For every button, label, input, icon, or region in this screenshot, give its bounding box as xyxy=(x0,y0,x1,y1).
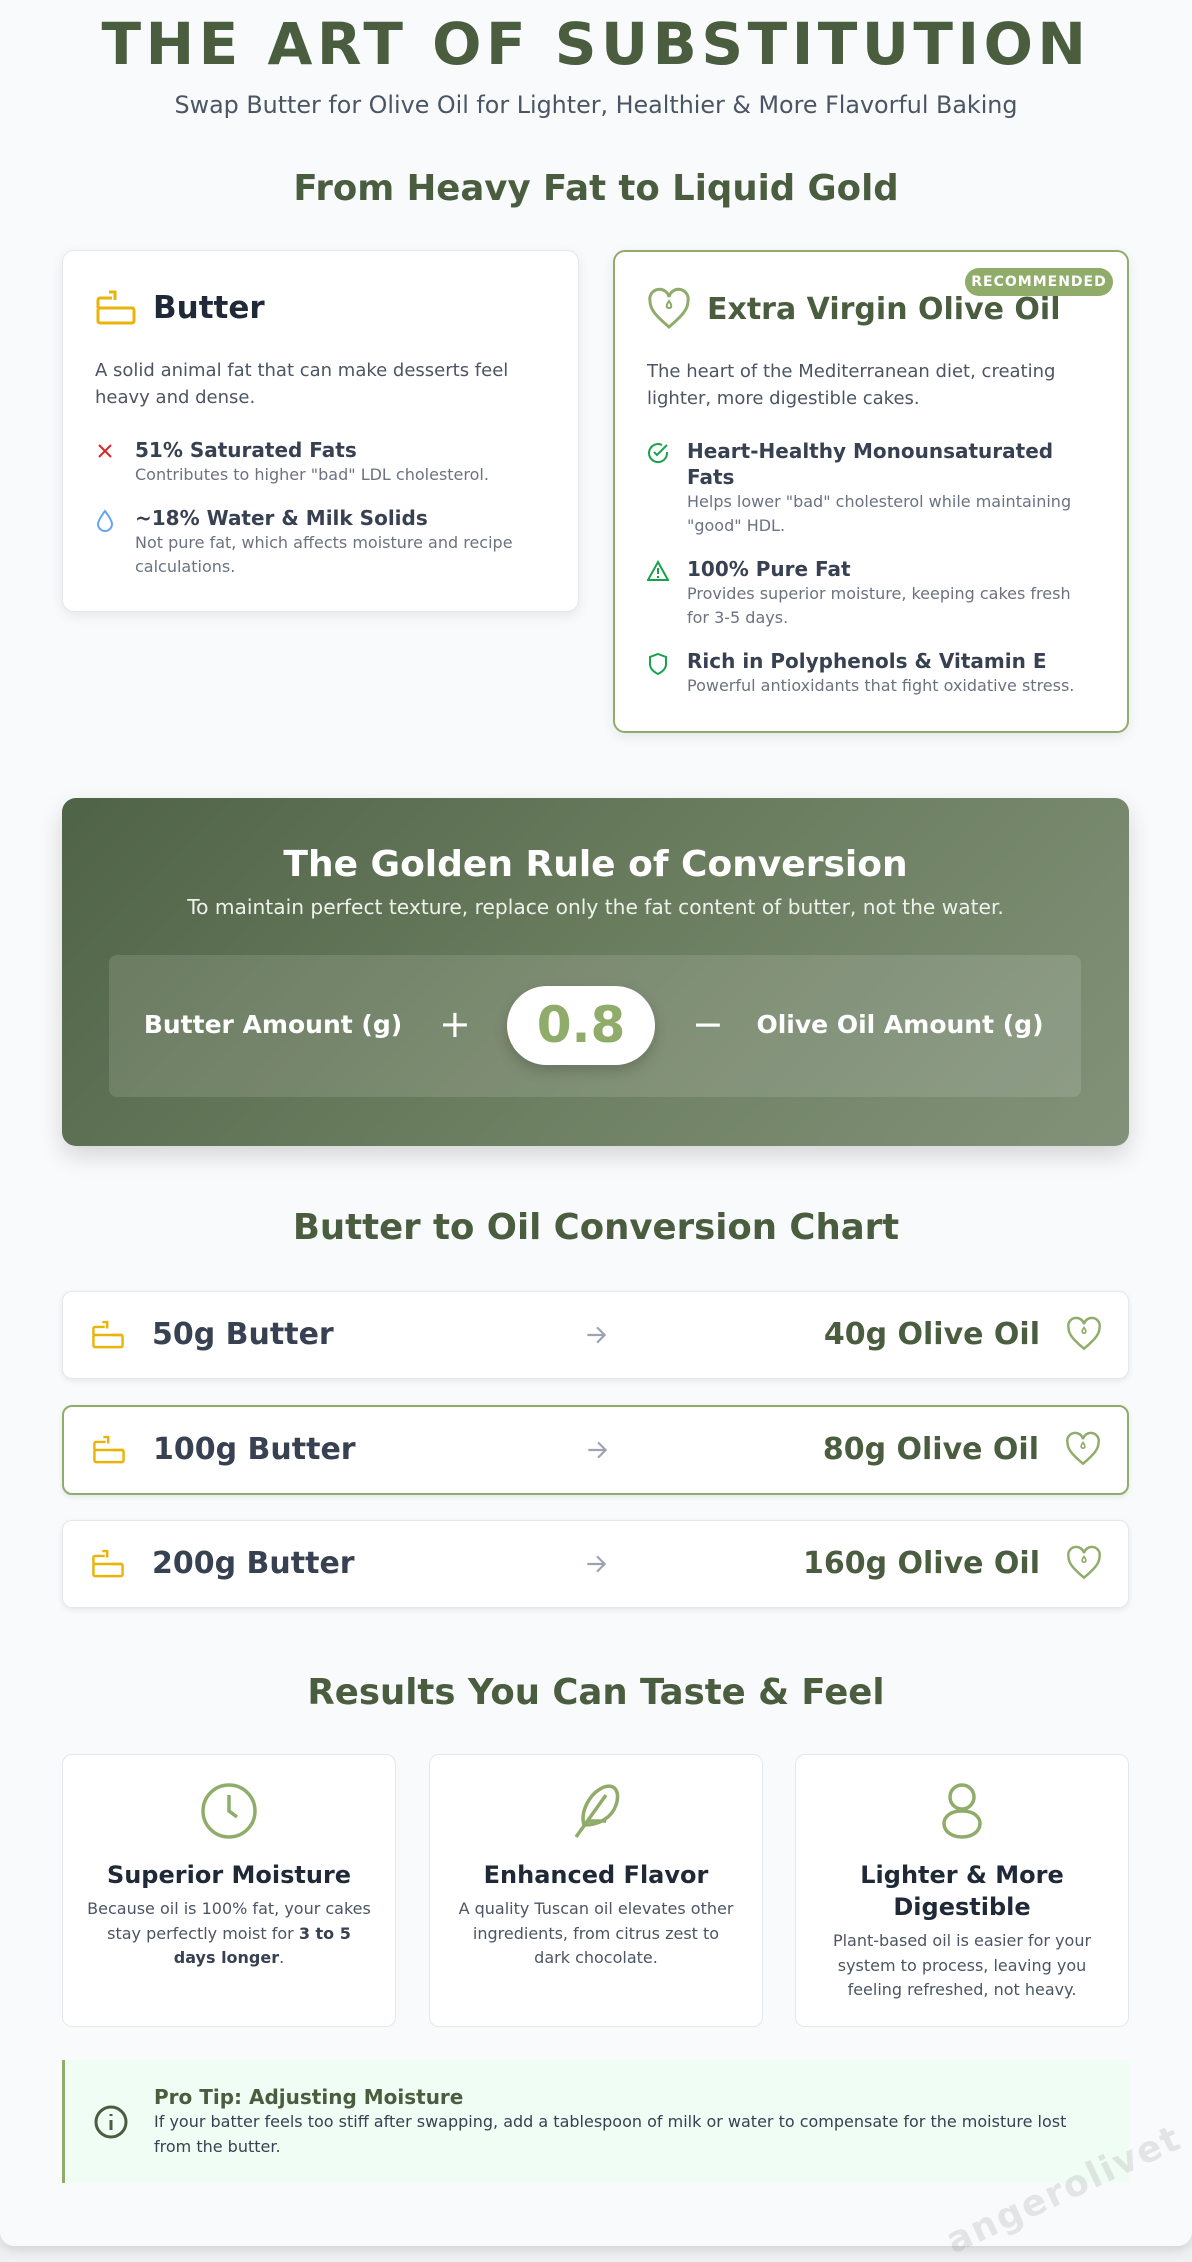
subtitle: Swap Butter for Olive Oil for Lighter, Healthier & More Flavorful Baking xyxy=(174,91,1018,119)
pro tip title: Pro Tip: Adjusting Moisture xyxy=(154,2085,463,2109)
item: water & milk solids xyxy=(97,506,513,576)
heading: conversion chart: Butter to Oil Conversion Chart xyxy=(293,1207,899,1248)
row: 200g xyxy=(62,1520,1129,1608)
item: saturated fats: Contributes to higher "bad" LDL cholesterol. xyxy=(135,465,489,484)
butter header: Butter xyxy=(153,290,265,326)
row: 200g: 200g Butter xyxy=(152,1546,355,1581)
olive header: Extra Virgin Olive Oil xyxy=(707,292,1060,326)
item: pure fat xyxy=(647,557,1071,627)
formula box xyxy=(109,955,1081,1097)
item: monounsaturated xyxy=(648,439,1071,535)
card: lighter & digestible: Lighter & More Digestible xyxy=(860,1861,1064,1921)
item: pure fat: Provides superior moisture, keeping cakes fresh for 3-5 days. xyxy=(687,584,1071,627)
card: enhanced flavor: Enhanced Flavor xyxy=(484,1861,708,1889)
row: 50g: 50g Butter xyxy=(152,1317,334,1352)
card: enhanced flavor: A quality Tuscan oil elevates other ingredients, from citrus zest to dark chocolate. xyxy=(459,1899,733,1967)
item: polyphenols: Powerful antioxidants that fight oxidative stress. xyxy=(687,676,1074,695)
butter description: A solid animal fat that can make desserts feel heavy and dense. xyxy=(95,360,508,408)
pill: 0.8: 0.8 xyxy=(537,996,625,1054)
title: THE ART OF SUBSTITUTION xyxy=(102,10,1090,78)
heading: from heavy fat: From Heavy Fat to Liquid Gold xyxy=(293,168,899,209)
card: enhanced flavor xyxy=(429,1754,763,2027)
item: monounsaturated: Fats xyxy=(687,465,734,489)
panel: butter card xyxy=(62,250,579,612)
operator: plus: + xyxy=(439,1002,471,1046)
panel: olive oil card xyxy=(613,250,1129,733)
card: superior moisture: Superior Moisture xyxy=(107,1861,351,1889)
golden rule title: The Golden Rule of Conversion xyxy=(283,844,908,885)
icon: heart with drop xyxy=(648,288,690,329)
card: superior moisture xyxy=(62,1754,396,2027)
callout: pro tip xyxy=(62,2060,1129,2183)
icon: info xyxy=(94,2106,128,2138)
card: lighter & digestible xyxy=(795,1754,1129,2027)
badge: recommended xyxy=(965,268,1113,296)
olive description: The heart of the Mediterranean diet, creating lighter, more digestible cakes. xyxy=(647,361,1055,409)
row: 200g: 160g Olive Oil xyxy=(803,1546,1040,1581)
butter header xyxy=(96,290,265,326)
row: 100g: 80g Olive Oil xyxy=(823,1432,1039,1467)
row: 100g xyxy=(62,1405,1129,1495)
icon: person xyxy=(942,1783,982,1839)
item: monounsaturated: Heart-Healthy Monounsaturated xyxy=(687,439,1053,463)
pro tip text: If your batter feels too stiff after swapping, add a tablespoon of milk or water to compensate for the moisture lost from the butter. xyxy=(154,2112,1066,2156)
item: monounsaturated: Helps lower "bad" cholesterol while maintaining "good" HDL. xyxy=(687,492,1071,535)
icon: butter xyxy=(96,290,136,324)
panel: golden rule xyxy=(62,798,1129,1146)
formula: butter amount: Butter Amount (g) xyxy=(144,1010,402,1039)
item: water & milk solids: ~18% Water & Milk Solids xyxy=(135,506,428,530)
operator: minus: − xyxy=(692,1002,724,1046)
item: polyphenols xyxy=(649,649,1074,695)
row: 50g: 40g Olive Oil xyxy=(824,1317,1040,1352)
item: saturated fats: 51% Saturated Fats xyxy=(135,438,357,462)
row: 50g xyxy=(62,1291,1129,1379)
watermark: angerolivet xyxy=(940,2117,1188,2262)
heading: results: Results You Can Taste & Feel xyxy=(307,1672,885,1713)
row: 100g: 100g Butter xyxy=(153,1432,356,1467)
card: superior moisture: Because oil is 100% fat, your cakes stay perfectly moist for 3 to 5 days longer. xyxy=(87,1899,371,1967)
icon: clock xyxy=(201,1783,257,1839)
item: pure fat: 100% Pure Fat xyxy=(687,557,851,581)
formula: olive oil amount: Olive Oil Amount (g) xyxy=(756,1010,1044,1039)
badge: recommended: RECOMMENDED xyxy=(971,274,1107,290)
pill: 0.8 xyxy=(507,986,655,1065)
item: polyphenols: Rich in Polyphenols & Vitamin E xyxy=(687,649,1046,673)
item: water & milk solids: Not pure fat, which affects moisture and recipe calculations. xyxy=(135,533,513,576)
card: lighter & digestible: Plant-based oil is easier for your system to process, leaving you feeling refreshed, not heavy. xyxy=(833,1931,1091,1999)
item: saturated fats xyxy=(98,438,489,484)
icon: feather xyxy=(574,1784,620,1838)
golden rule subtitle: To maintain perfect texture, replace only the fat content of butter, not the water. xyxy=(187,895,1004,919)
